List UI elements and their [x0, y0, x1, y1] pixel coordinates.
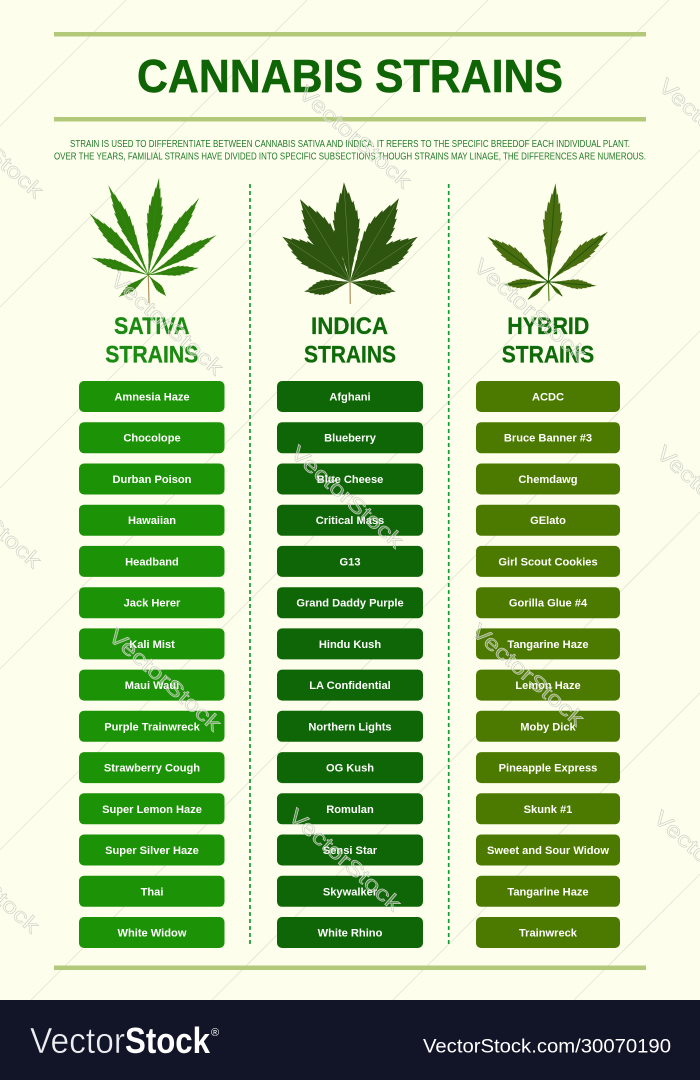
- pill: Romulan: Romulan: [326, 804, 374, 816]
- pill: Skywalker: Skywalker: [323, 886, 378, 898]
- pill: Amnesia Haze: Amnesia Haze: [114, 392, 190, 404]
- pill: Maui Waui: Maui Waui: [125, 680, 179, 692]
- logo: VectorStock: Vector: [30, 1020, 125, 1061]
- heading: sativa strains: [105, 313, 198, 369]
- top rule: [54, 32, 646, 36]
- pill: ACDC: ACDC: [532, 392, 564, 404]
- pill: White Widow: White Widow: [118, 928, 187, 940]
- pill: Kali Mist: Kali Mist: [129, 639, 175, 651]
- pill: Kali Mist: [79, 628, 224, 659]
- pill: Bruce Banner #3: Bruce Banner #3: [504, 433, 592, 445]
- pill: Skunk #1: Skunk #1: [524, 804, 572, 816]
- watermarks: VectorStock: [104, 625, 226, 736]
- image id: VectorStock.com/30070190: [423, 1036, 671, 1058]
- pill: Sweet and Sour Widow: Sweet and Sour Widow: [487, 845, 609, 857]
- pill: Hindu Kush: Hindu Kush: [319, 639, 381, 651]
- pill: Purple Trainwreck: [79, 711, 224, 742]
- pill: Super Lemon Haze: [79, 793, 224, 824]
- pill: ACDC: [476, 381, 620, 412]
- watermarks: VectorStock: [106, 269, 228, 380]
- watermarks: [0, 75, 700, 938]
- pill: Skywalker: [277, 876, 423, 907]
- pill: Headband: Headband: [125, 556, 179, 568]
- pill: Maui Waui: [79, 670, 224, 701]
- pill: Thai: Thai: [141, 886, 163, 898]
- pill: Hawaiian: Hawaiian: [128, 515, 176, 527]
- pill: Pineapple Express: [476, 752, 620, 783]
- pill: GElato: [476, 505, 620, 536]
- watermarks: VectorStock: [294, 82, 416, 193]
- watermarks: VectorStock: [467, 620, 589, 731]
- pill: Super Silver Haze: Super Silver Haze: [105, 845, 199, 857]
- intro text: [54, 139, 646, 162]
- pill: Afghani: Afghani: [329, 392, 371, 404]
- pill: Durban Poison: Durban Poison: [113, 474, 192, 486]
- pill: G13: G13: [340, 556, 360, 568]
- pill: Super Lemon Haze: Super Lemon Haze: [102, 804, 202, 816]
- watermarks: VectorStock: [286, 442, 408, 553]
- heading: indica strains: INDICA: [311, 313, 388, 340]
- pill: Hindu Kush: [277, 628, 423, 659]
- indica strain list: [277, 381, 423, 948]
- watermarks: VectorStock: [469, 255, 591, 366]
- heading: indica strains: STRAINS: [304, 342, 396, 369]
- icon: sativa leaf: [85, 177, 220, 303]
- pill: Thai: [79, 876, 224, 907]
- pill: Trainwreck: Trainwreck: [519, 928, 578, 940]
- pill: Northern Lights: [277, 711, 423, 742]
- title: CANNABIS STRAINS: [137, 50, 563, 102]
- pill: GElato: GElato: [530, 515, 566, 527]
- pill: Chocolope: Chocolope: [123, 433, 181, 445]
- pill: Blue Cheese: [277, 464, 423, 494]
- pill: Strawberry Cough: [79, 752, 224, 783]
- pill: Strawberry Cough: Strawberry Cough: [104, 763, 200, 775]
- pill: Lemon Haze: Lemon Haze: [515, 680, 581, 692]
- pill: Girl Scout Cookies: Girl Scout Cookies: [498, 556, 598, 568]
- pill: Skunk #1: [476, 793, 620, 824]
- pill: White Rhino: [277, 917, 423, 948]
- pill: Grand Daddy Purple: [277, 587, 423, 618]
- pill: Blueberry: [277, 422, 423, 453]
- pill: OG Kush: [277, 752, 423, 783]
- pill: Moby Dick: Moby Dick: [520, 721, 577, 733]
- heading: hybrid strains: [502, 313, 594, 369]
- pill: Lemon Haze: [476, 670, 620, 701]
- pill: Northern Lights: Northern Lights: [308, 721, 392, 733]
- heading: sativa strains: STRAINS: [105, 342, 198, 369]
- pill: Blue Cheese: Blue Cheese: [317, 474, 383, 486]
- hybrid strain list: [476, 381, 620, 948]
- pill: Critical Mass: Critical Mass: [316, 515, 384, 527]
- pill: Tangarine Haze: [476, 628, 620, 659]
- pill: Girl Scout Cookies: [476, 546, 620, 577]
- pill: Critical Mass: [277, 505, 423, 536]
- pill: LA Confidential: LA Confidential: [309, 680, 391, 692]
- pill: Tangarine Haze: [476, 876, 620, 907]
- panel: hybrid strains: [476, 183, 620, 948]
- panel: sativa strains: [79, 177, 224, 948]
- pill: Pineapple Express: Pineapple Express: [499, 763, 597, 775]
- pill: Sensi Star: Sensi Star: [323, 845, 378, 857]
- pill: Purple Trainwreck: Purple Trainwreck: [104, 721, 201, 733]
- pill: Sweet and Sour Widow: [476, 834, 620, 866]
- pill: Tangarine Haze: Tangarine Haze: [507, 886, 589, 898]
- pill: Jack Herer: Jack Herer: [124, 598, 181, 610]
- logo: VectorStock: ®: [211, 1027, 219, 1039]
- pill: Chemdawg: [476, 464, 620, 494]
- bottom rule: [54, 966, 646, 970]
- watermarks: VectorStock: [284, 805, 406, 916]
- pill: Gorilla Glue #4: [476, 587, 620, 618]
- logo: VectorStock: [30, 1020, 219, 1061]
- pill: Chocolope: [79, 422, 224, 453]
- heading: sativa strains: SATIVA: [114, 313, 190, 340]
- pill: White Widow: [79, 917, 224, 948]
- pill: White Rhino: White Rhino: [318, 928, 383, 940]
- pill: Jack Herer: [79, 587, 224, 618]
- pill: Hawaiian: [79, 505, 224, 536]
- pill: Blueberry: Blueberry: [324, 433, 377, 445]
- icon: hybrid leaf: [483, 183, 613, 302]
- icon: indica leaf: [276, 181, 424, 304]
- pill: Trainwreck: [476, 917, 620, 948]
- pill: Bruce Banner #3: [476, 422, 620, 453]
- heading: indica strains: [304, 313, 396, 369]
- pill: Sensi Star: [277, 834, 423, 866]
- sativa strain list: [79, 381, 224, 948]
- pill: Headband: [79, 546, 224, 577]
- pill: Gorilla Glue #4: Gorilla Glue #4: [509, 598, 588, 610]
- logo: VectorStock: Stock: [125, 1020, 211, 1061]
- pill: Chemdawg: Chemdawg: [518, 474, 578, 486]
- panel: indica strains: [276, 181, 424, 948]
- pill: Tangarine Haze: Tangarine Haze: [507, 639, 589, 651]
- pill: Afghani: [277, 381, 423, 412]
- title rule: [54, 117, 646, 122]
- pill: LA Confidential: [277, 670, 423, 701]
- pill: Super Silver Haze: [79, 834, 224, 866]
- footer band: [0, 1000, 700, 1080]
- heading: hybrid strains: STRAINS: [502, 342, 594, 369]
- pill: Grand Daddy Purple: Grand Daddy Purple: [296, 598, 404, 610]
- heading: hybrid strains: HYBRID: [507, 313, 589, 340]
- pill: OG Kush: OG Kush: [326, 763, 374, 775]
- pill: Romulan: [277, 793, 423, 824]
- pill: G13: [277, 546, 423, 577]
- pill: Moby Dick: [476, 711, 620, 742]
- pill: Amnesia Haze: [79, 381, 224, 412]
- pill: Durban Poison: [79, 464, 224, 494]
